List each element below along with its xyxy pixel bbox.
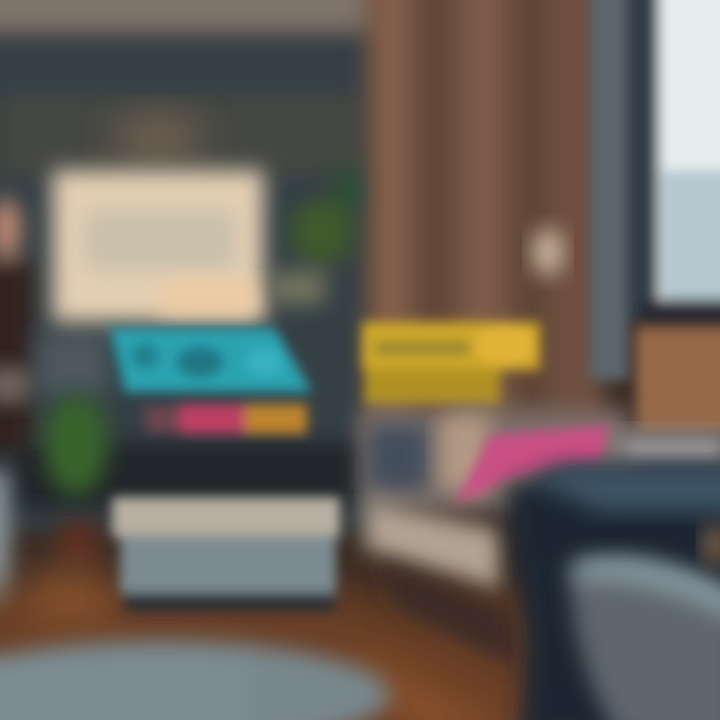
teal sign [110, 328, 312, 392]
rug [0, 640, 390, 720]
left shelf [0, 198, 108, 620]
wall poster [52, 114, 264, 322]
background wall [0, 0, 390, 530]
colorful strip [145, 404, 307, 434]
plant on wall [270, 164, 360, 304]
curtains [365, 0, 605, 440]
window and sheer curtain [590, 0, 720, 433]
sofa with pillows [360, 410, 720, 670]
potted plant [44, 395, 108, 568]
floor [0, 570, 590, 720]
yellow sign [362, 322, 540, 406]
wall lamp [532, 228, 564, 276]
ottoman [112, 497, 340, 611]
armchair [505, 466, 720, 720]
